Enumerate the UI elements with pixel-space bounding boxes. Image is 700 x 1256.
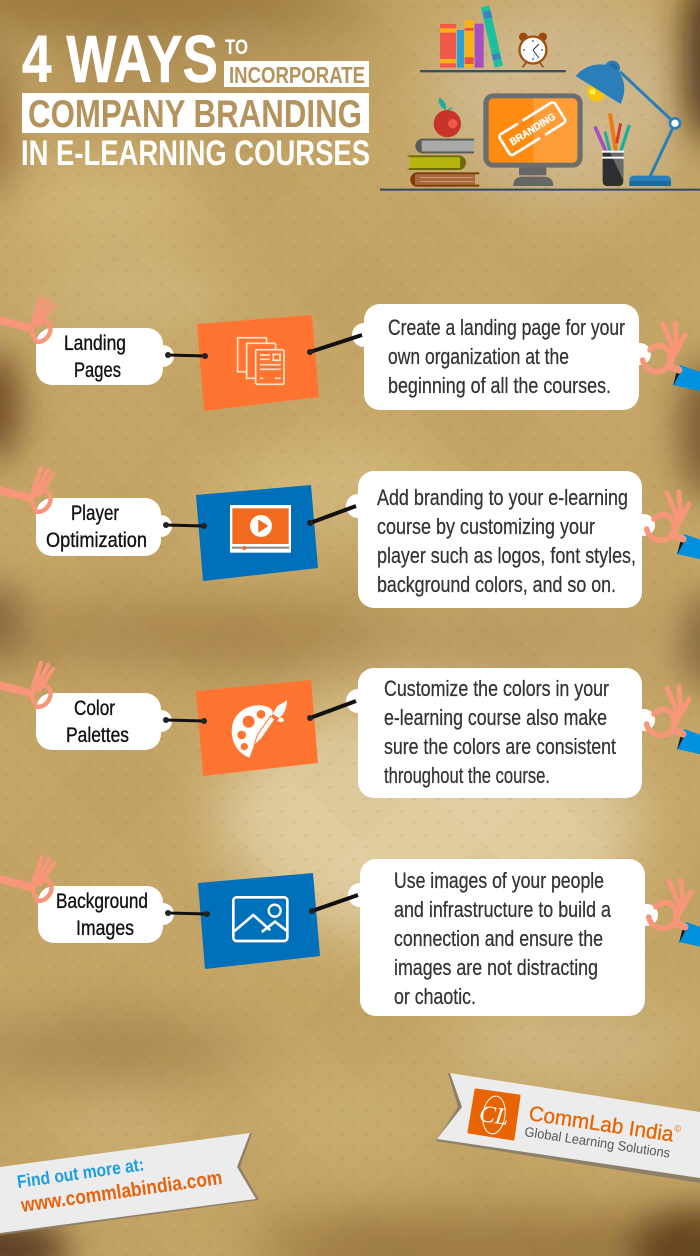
- description box: Customize the colors in your: [384, 676, 609, 701]
- icon: upright books: [440, 5, 503, 68]
- icon: lower shelf: [380, 189, 700, 191]
- tag: background images: Background: [56, 890, 148, 913]
- row 3: color palettes: [0, 663, 700, 798]
- left hand: [0, 857, 54, 901]
- description box: [352, 304, 651, 410]
- icon: upper shelf: [420, 70, 566, 72]
- card: blue: [196, 485, 318, 581]
- card: orange: [196, 680, 318, 776]
- description box: beginning of all the courses.: [388, 373, 611, 398]
- stamp: branding: BRANDING: [508, 112, 558, 148]
- icon: documents: [238, 338, 284, 384]
- description box: Create a landing page for your: [388, 315, 625, 340]
- tag: landing pages: Pages: [74, 359, 121, 382]
- icon: picture: [233, 897, 287, 941]
- connector: [165, 352, 208, 359]
- icon: desk lamp: [576, 61, 681, 186]
- connector: [163, 522, 207, 529]
- tag: color palettes: Color: [74, 697, 115, 720]
- icon: paint palette: [232, 700, 287, 758]
- right hand: [647, 492, 700, 560]
- title line: 4 ways: 4 WAYS: [22, 22, 218, 97]
- right hand: [643, 323, 700, 391]
- connector: [309, 895, 358, 914]
- description box: [346, 471, 655, 608]
- description box: connection and ensure the: [394, 926, 603, 951]
- left hand: [0, 468, 53, 512]
- connector: [307, 506, 356, 526]
- description box: player such as logos, font styles,: [377, 543, 636, 568]
- description box: own organization at the: [388, 344, 569, 369]
- tag: color palettes: [36, 693, 172, 750]
- connector: [307, 701, 356, 721]
- connector: [163, 717, 207, 724]
- tag: color palettes: Palettes: [66, 724, 129, 747]
- tag: background images: Images: [76, 917, 134, 940]
- description box: or chaotic.: [394, 984, 476, 1009]
- tag: background images: [38, 886, 174, 943]
- tag: player optimization: Optimization: [46, 529, 147, 552]
- description box: sure the colors are consistent: [384, 734, 616, 759]
- connector: [165, 910, 210, 917]
- ribbon: find out more: [0, 1133, 259, 1235]
- right hand: [649, 880, 700, 948]
- icon: alarm clock: [518, 33, 548, 67]
- logo mark: CL: [469, 1090, 519, 1139]
- illustration: desk with books, monitor and lamp: [380, 5, 700, 191]
- icon: stacked books: [407, 139, 479, 187]
- description box: images are not distracting: [394, 955, 598, 980]
- ribbon text: website: www.commlabindia.com: [19, 1167, 224, 1217]
- description box: Use images of your people: [394, 868, 604, 893]
- icon: pencil cup: [595, 113, 629, 186]
- row 4: background images: [0, 857, 700, 1016]
- title: [21, 22, 370, 173]
- tagline: Global Learning Solutions: [524, 1124, 671, 1161]
- row 2: player optimization: [0, 468, 700, 608]
- row 1: landing pages: [0, 298, 700, 411]
- icon: apple: [434, 97, 461, 137]
- ribbon text: find out more: Find out more at:: [16, 1154, 145, 1192]
- tag: player optimization: [36, 498, 172, 556]
- description box: background colors, and so on.: [377, 572, 616, 597]
- copyright mark: ©: [674, 1123, 682, 1134]
- brand name: CommLab India: [527, 1102, 675, 1147]
- title box: incorporate: INCORPORATE: [229, 62, 365, 88]
- icon: video player: [230, 505, 291, 553]
- card: blue: [198, 873, 320, 969]
- description box: Add branding to your e-learning: [377, 485, 628, 510]
- tag: landing pages: Landing: [64, 332, 126, 355]
- ribbon: commlab india logo: [436, 1073, 700, 1183]
- description box: and infrastructure to build a: [394, 897, 612, 922]
- left hand: [0, 298, 53, 342]
- card: orange: [197, 315, 319, 411]
- title box: company branding: COMPANY BRANDING: [28, 93, 362, 136]
- description box: [348, 859, 658, 1016]
- description box: [346, 668, 655, 798]
- logo mark: CL: CL: [478, 1101, 510, 1131]
- description box: course by customizing your: [377, 514, 595, 539]
- icon: monitor with branding stamp: [483, 93, 583, 186]
- description box: throughout the course.: [384, 763, 550, 788]
- left hand: [0, 663, 53, 707]
- tag: player optimization: Player: [71, 502, 119, 525]
- connector: [307, 335, 362, 355]
- title line: in e-learning courses: IN E-LEARNING COURSES: [21, 134, 370, 173]
- description box: e-learning course also make: [384, 705, 607, 730]
- right hand: [647, 687, 700, 755]
- tag: landing pages: [36, 328, 174, 385]
- title word: to: TO: [225, 36, 248, 59]
